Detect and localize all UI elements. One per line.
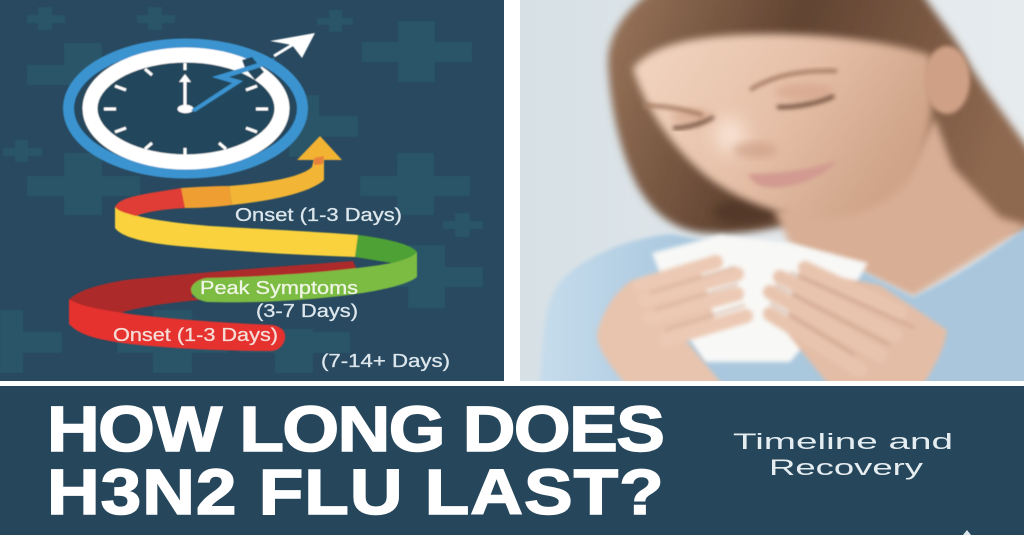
ribbon: amber segment to arrow	[229, 158, 324, 205]
ribbon front: red onset band	[69, 299, 285, 351]
ribbon back: dark red	[69, 261, 357, 318]
ribbon: orange segment	[181, 186, 232, 208]
label: peak days: (3-7 Days)	[256, 301, 358, 321]
shirt	[540, 224, 1024, 390]
lips	[748, 160, 837, 187]
label: onset on red band: Onset (1-3 Days)	[113, 325, 278, 345]
panel: timeline background	[0, 0, 504, 381]
neck	[775, 118, 1024, 297]
label: recovery days: (7-14+ Days)	[321, 351, 450, 371]
nose shadow	[733, 142, 777, 158]
eye shadow	[671, 83, 835, 125]
eyebrows	[643, 71, 837, 115]
tissue	[652, 235, 868, 362]
eyes	[673, 96, 834, 128]
face	[633, 34, 933, 218]
title line 1: HOW LONG DOES	[47, 393, 665, 465]
panel: title band	[0, 386, 1024, 535]
label: onset upper: Onset (1-3 Days)	[235, 205, 402, 225]
hair	[608, 0, 1024, 233]
ribbon: green back	[355, 235, 417, 263]
background crosses	[0, 7, 483, 373]
ribbon: yellow band	[115, 207, 358, 257]
title line 2: H3N2 FLU LAST?	[47, 456, 664, 528]
right hand	[770, 268, 947, 390]
ribbon arrowhead	[297, 136, 342, 160]
label: peak symptoms: Peak Symptoms	[200, 278, 358, 298]
chart: spiral timeline ribbon	[69, 136, 417, 351]
panel: photo of woman holding tissue	[520, 0, 1024, 390]
nose highlight	[714, 117, 746, 153]
ear	[924, 46, 970, 114]
icon: tiny corner mark	[963, 530, 971, 535]
icon: clock with lightning arrow	[68, 33, 315, 173]
subtitle line 1: Timeline and	[733, 429, 953, 454]
hair shadow under chin	[713, 200, 777, 224]
ribbon: red turn	[115, 188, 186, 216]
ribbon: green front with peak pill	[191, 252, 417, 302]
left hand	[597, 262, 746, 390]
subtitle line 2: Recovery	[769, 455, 923, 480]
